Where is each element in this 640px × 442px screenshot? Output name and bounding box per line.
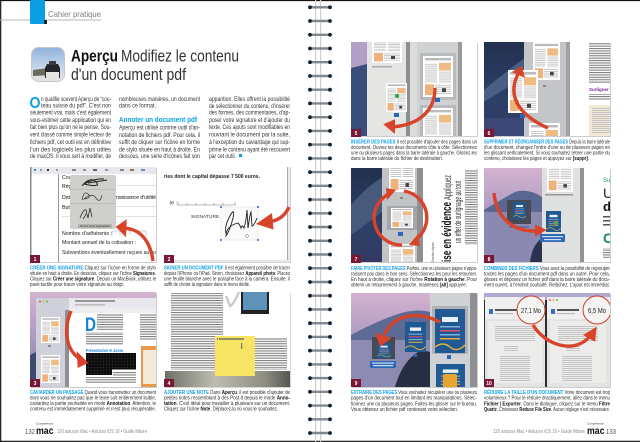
icon: Aperçu app: [32, 48, 64, 82]
intro text column 1: fichiers pdf, cet outil est en définitive: [30, 139, 111, 146]
title: d'un document pdf: [71, 65, 186, 84]
panel 2: signer un document: le :: [170, 200, 177, 206]
panel 7: faire pivoter des pages: [351, 150, 478, 274]
panel 1: créer une signature: Montant annuel de la cotisation :: [62, 240, 136, 246]
arrow: [374, 188, 427, 246]
arrow: [256, 207, 289, 230]
intro text column 1: fait bien plus qu'on ne le pense. Sou-: [30, 124, 111, 131]
intro text column 3: texte. Ces ajouts sont modifiables en: [209, 124, 290, 131]
caption 8: COMBINER DES FICHIERS Vous avez la possibilité de regrouper: [484, 266, 610, 272]
panel 8: combiner des fichiers: [484, 155, 613, 263]
caption 2: SIGNER UN DOCUMENT PDF Il est également possible de tracer: [164, 266, 290, 272]
panel 2: signer un document: SIGNATURE :: [191, 214, 222, 220]
intro text column 2: [119, 96, 200, 160]
caption 9: pages d'un document tout en limitant les manipulations. Sélec-: [351, 396, 477, 402]
intro text column 1: vent classé comme simple lecteur de: [30, 132, 111, 139]
caption 1: Cliquez sur Créer une signature. Depuis un MacBook, utilisez le: [30, 276, 156, 282]
intro text column 1: l'un des logiciels les plus utiles: [30, 146, 112, 153]
caption 2: depuis l'iPhone ou l'iPad. Sinon, choisissez Appareil photo. Placez: [164, 271, 290, 277]
intro text column 3: rouvrant le document par la suite,: [209, 132, 290, 139]
caption 8: ment ouvert, à l'endroit souhaité. Relâchez. L'ajout est immédiat.: [484, 282, 610, 288]
title: Modifiez le contenu: [121, 46, 239, 66]
panel 1: créer une signature: Rég: [62, 184, 72, 190]
intro text column 2: notation de fichiers pdf. Pour cela, il: [119, 132, 200, 139]
caption 5: dans la barre latérale du fichier de destination.: [351, 156, 443, 162]
panel 2: signer un document: ries dont le capital dépasse 7 500 euros.: [164, 174, 261, 180]
intro text column 1: de macOS. Il vous sert à modifier, de: [30, 153, 111, 160]
intro text column 2: de stylo située en haut à droite. En: [119, 146, 200, 153]
signature popup: Créer une signature: [80, 224, 111, 228]
panel 5: insérer des pages: [351, 30, 478, 149]
caption 9: Vous obtenez un fichier pdf contenant votre sélection.: [351, 407, 458, 413]
panel 8: combiner des fichiers: d: [603, 199, 611, 214]
panel 9: extraire des pages: [351, 293, 478, 394]
panel 6: supprimer et réorganiser: [484, 42, 611, 165]
footer right: mac: [587, 425, 605, 437]
caption 4: Cliquez sur l'icône Note. Déplacez-la où vous le souhaitez.: [164, 406, 278, 412]
badge 10: 10: [486, 381, 492, 387]
badge 2: 2: [168, 257, 171, 263]
section header: Cahier pratique: Cahier pratique: [48, 9, 101, 19]
size callout 6,5 Mo: 6,5 Mo: [588, 308, 606, 315]
caption 1: [30, 264, 156, 288]
size callout 27,1 Mo: 27,1 Mo: [521, 308, 541, 315]
panel 7: faire pivoter des pages: ise en évidence: [440, 202, 454, 262]
intro text column 3: [209, 96, 291, 160]
caption 2: [164, 266, 290, 288]
panel 1: créer une signature: Dat: [62, 195, 71, 201]
intro text column 2: dessous, une série d'icônes fait son: [119, 153, 200, 160]
intro text column 2: Aperçu est utilisé comme outil d'an-: [119, 124, 200, 132]
caption 6: d'un document, changez l'ordre d'une ou de plusieurs pages en: [484, 145, 610, 151]
caption 4: tation. C'est idéal pour travailler à plusieurs sur un document.: [164, 401, 290, 407]
footer right: 133: [606, 429, 616, 436]
caption 6: SUPPRIMER ET RÉORGANISER DES PAGES Depuis la barre latérale: [484, 138, 610, 146]
intro text column 3: des formes, des commentaires, d'ap-: [209, 110, 290, 117]
caption 3: dont vous ne souhaitez pas que le texte soit entièrement lisible,: [30, 396, 156, 402]
caption 4: [164, 390, 290, 412]
caption 6: les glissant verticalement. Si vous souhaitez retirer une partie du: [484, 150, 610, 156]
caption 10: Quartz. Choisissez Reduce File Size. Aucun réglage n'est nécessaire.: [484, 407, 610, 413]
caption 10: [484, 388, 610, 413]
signature box: [220, 206, 259, 241]
caption 8: glissez et déposez un fichier pdf dans la barre latérale du docu-: [484, 277, 610, 283]
caption 7: raissent pas dans le bon sens. Sélectionnez-les pour les retourner.: [351, 272, 477, 278]
caption 5: INSÉRER DES PAGES Il est possible d'ajouter des pages dans un: [351, 138, 477, 146]
caption 7: En haut à droite, cliquez sur l'icône Rotation à gauche. Pour: [351, 277, 477, 283]
caption 7: [351, 266, 477, 288]
intro text column 3: poser votre signature et d'ajouter du: [209, 117, 290, 124]
intro text column 3: de sélectionner du contenu, d'insérer: [209, 103, 291, 110]
caption 7: FAIRE PIVOTER DES PAGES Parfois, une ou plusieurs pages n'appa-: [351, 266, 477, 272]
panel 1: créer une signature: Subventions éventuellement reçues au co: [62, 250, 156, 256]
footer left: 132: [25, 429, 35, 436]
spiral binding: [308, 0, 332, 442]
caption 9: tionnez une ou plusieurs pages. Faites-les glisser sur le bureau.: [351, 402, 477, 408]
title: [71, 46, 239, 84]
panel 1: créer une signature: Cou: [62, 175, 72, 181]
panel 7: faire pivoter des pages: Ensuite cliquez: [430, 242, 435, 262]
caption 7: obtenir un retournement à gauche, maintenez [alt] appuyée.: [351, 282, 467, 288]
intro text column 3: prime le contenu ayant été recouvert: [209, 146, 290, 153]
badge 3: 3: [34, 381, 37, 387]
intro text column 3: apparition. Elles offrent la possibilité: [209, 96, 290, 103]
intro text column 1: teau suisse du pdf”. C'est non: [41, 102, 111, 110]
caption 4: AJOUTER UNE NOTE Dans Aperçu, il est possible d'ajouter de: [164, 390, 290, 396]
badge 1: 1: [34, 257, 37, 263]
arrow: [383, 88, 435, 134]
intro text column 3: par cet outil.: [209, 153, 236, 160]
caption 3: contenu est immédiatement supprimé et n'est plus récupérable.: [30, 406, 156, 412]
intro text column 2: nombreuses manières, un document: [119, 96, 200, 103]
panel 3: caviarder un passage: [30, 292, 157, 388]
caption 3: caviardez la partie souhaitée en mode Annotation. Attention, le: [30, 401, 156, 407]
caption 9: EXTRAIRE DES PAGES Vous souhaitez récupérer une ou plusieurs: [351, 390, 477, 396]
badge 9: 9: [355, 381, 358, 387]
panel 7: faire pivoter des pages: Appliquez: [443, 175, 454, 200]
intro text column 2: suffit de cliquer sur l'icône en forme: [119, 139, 200, 146]
title: Aperçu: [71, 46, 118, 66]
panel 4: ajouter une note: [164, 292, 291, 388]
caption 8: [484, 266, 610, 288]
intro text column 1: n qualifie souvent Aperçu de “cou-: [41, 96, 111, 103]
caption 2: suffit de choisir la signature dans le menu dédié.: [164, 282, 250, 288]
intro text column 1: seulement vrai, mais c'est également: [30, 110, 111, 117]
footer left: mac: [36, 425, 54, 437]
panel 6: supprimer et réorganiser: Surligner: [589, 87, 609, 92]
caption 4: petites notes ressemblant à des Post-it depuis le mode Anno-: [164, 396, 290, 402]
caption 9: [351, 390, 477, 413]
caption 8: toutes les pages d'un document pdf dans un autre. Pour cela,: [484, 272, 610, 278]
footer left: Compétence: [36, 422, 53, 426]
badge 6: 6: [488, 131, 491, 137]
intro text column 1: sous-estimer cette application qui en: [30, 117, 111, 124]
caption 10: RÉDUIRE LA TAILLE D'UN DOCUMENT Votre document est trop: [484, 388, 610, 396]
intro text column 1: O: [30, 95, 40, 112]
caption 1: située en haut à droite. En dessous, cliquez sur l'icône Signatures.: [30, 271, 156, 277]
section header: Cahier pratique: [0, 0, 101, 24]
yellow note: [215, 336, 255, 376]
panel 1: créer une signature: Nombre d'adhérents :: [62, 231, 112, 237]
arrow: [533, 325, 597, 346]
badge 4: 4: [168, 381, 171, 387]
panel 8: combiner des fichiers: Su: [603, 178, 610, 184]
caption 3: CAVIARDER UN PASSAGE Quand vous transmettez un document: [30, 390, 156, 396]
arrow: [512, 66, 548, 128]
caption 1: pavé tactile pour tracer votre signature au doigt.: [30, 282, 124, 288]
panel 10: réduire la taille: [484, 293, 611, 388]
intro text column 2: dans ce format.: [119, 102, 156, 110]
panel 3: caviarder un passage: Présentation et zoom: [86, 348, 123, 353]
arrow: [116, 219, 153, 261]
caption 6: contenu, choisissez les pages et appuyez sur [suppr].: [484, 156, 589, 162]
intro text column 2: Annoter un document pdf: [119, 115, 197, 124]
panel 1: créer une signature: But: [62, 205, 70, 211]
footer right: [493, 422, 616, 437]
caption 1: CRÉER UNE SIGNATURE Cliquez sur l'icône en forme de stylo: [30, 264, 156, 272]
footer left: 120 astuces Mac • Astuces iOS 16 • Guide Mbore: [57, 429, 147, 435]
footer left: [25, 422, 147, 437]
caption 3: [30, 390, 156, 412]
caption 10: volumineux ? Pour le réduire drastiquement, allez dans le menu: [484, 396, 610, 402]
panel 8: combiner des fichiers: U: [603, 185, 613, 201]
panel 2: signer un document: [164, 167, 291, 263]
intro text column 3: à l'exception du caviardage qui sup-: [209, 139, 290, 146]
footer right: 120 astuces Mac • Astuces iOS 16 • Guide Mbore: [493, 429, 585, 435]
badge 7: 7: [355, 257, 358, 263]
caption 5: une ou plusieurs pages dans la barre latérale à gauche. Glissez-les: [351, 150, 477, 156]
caption 6: [484, 138, 610, 162]
arrow: [494, 193, 547, 237]
caption 2: une feuille blanche avec le paraphe face à la caméra. Ensuite, il: [164, 276, 290, 282]
panel 1: créer une signature: naissance d'utilité: [116, 195, 156, 201]
footer right: Compétence: [587, 422, 604, 426]
panel 3: caviarder un passage: D: [85, 315, 96, 336]
caption 10: Fichier | Exporter. Dans le dialogue, cliquez sur le menu Filtre: [484, 402, 610, 408]
panel 8: combiner des fichiers: C: [603, 230, 613, 246]
intro text column 1: [30, 95, 112, 160]
arrow: [375, 316, 440, 347]
panel 1: créer une signature: [30, 167, 157, 263]
caption 5: document. Ouvrez les deux documents côte à côte. Sélectionnez: [351, 145, 477, 151]
badge 8: 8: [488, 257, 491, 263]
caption 5: [351, 138, 477, 162]
arrow: [67, 311, 88, 368]
badge 5: 5: [355, 131, 358, 137]
